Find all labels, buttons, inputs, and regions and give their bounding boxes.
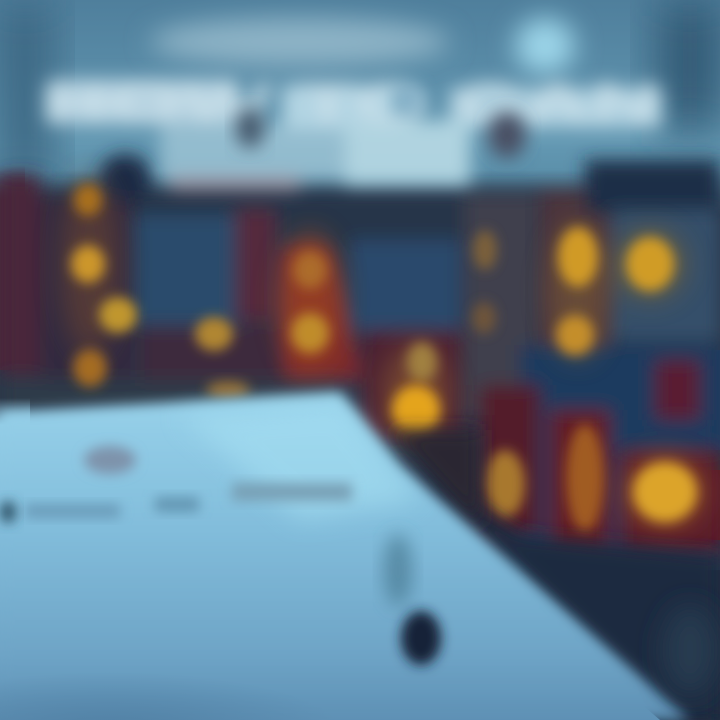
background: night sky bbox=[0, 0, 720, 240]
title: HOW TO CAN bbox=[40, 71, 660, 134]
title accents bbox=[236, 86, 526, 158]
glowing windows bbox=[60, 175, 707, 532]
snowy foreground bbox=[0, 392, 690, 720]
caption text on snow bbox=[0, 446, 352, 523]
dark street corner bbox=[380, 430, 720, 720]
figure on snow bbox=[384, 534, 441, 665]
title bbox=[40, 71, 662, 190]
street highlight bbox=[662, 605, 718, 695]
row of houses bbox=[0, 154, 720, 560]
